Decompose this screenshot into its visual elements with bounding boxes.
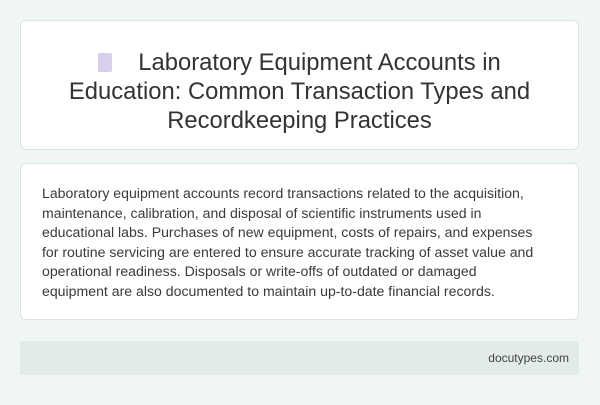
icon: receipt bbox=[98, 53, 112, 72]
title bbox=[69, 49, 530, 134]
title: Education: Common Transaction Types and bbox=[69, 78, 530, 105]
description text: maintenance, calibration, and disposal of scientific instruments used in bbox=[42, 204, 482, 220]
title panel bbox=[20, 20, 579, 150]
footer bbox=[20, 341, 579, 375]
footer text: docutypes.com bbox=[488, 351, 569, 365]
title: Recordkeeping Practices bbox=[167, 107, 432, 134]
description text: educational labs. Purchases of new equipment, costs of repairs, and expenses bbox=[42, 224, 532, 240]
description text: equipment are also documented to maintain up-to-date financial records. bbox=[42, 282, 495, 298]
title: Laboratory Equipment Accounts in bbox=[138, 49, 501, 76]
description text: for routine servicing are entered to ensure accurate tracking of asset value and bbox=[42, 244, 533, 260]
description panel bbox=[20, 163, 579, 320]
description text: Laboratory equipment accounts record transactions related to the acquisition, bbox=[42, 185, 524, 201]
description text bbox=[42, 185, 533, 299]
description text: operational readiness. Disposals or write-offs of outdated or damaged bbox=[42, 263, 477, 279]
